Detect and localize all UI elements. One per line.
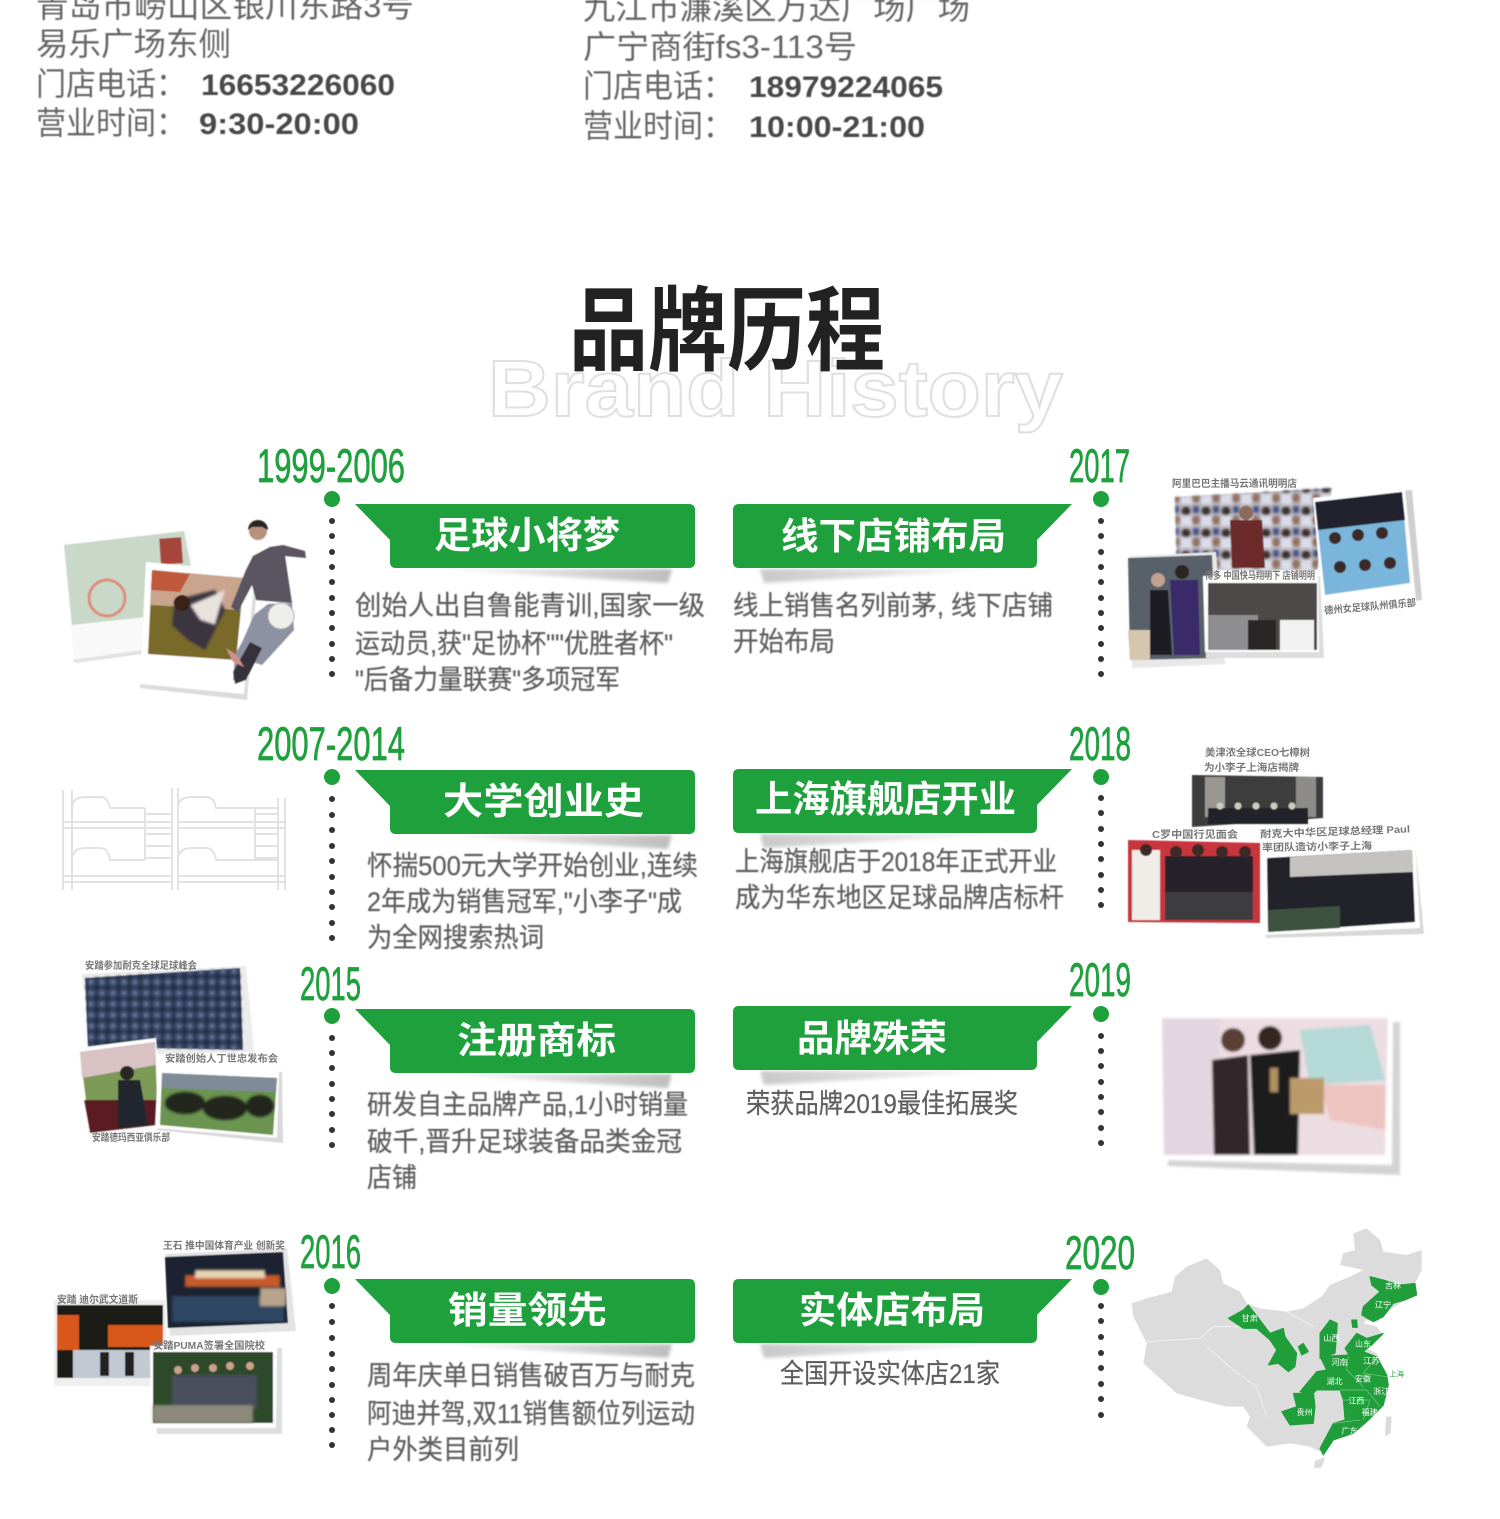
year: 2017 (1069, 439, 1130, 492)
year: 2018 (1069, 717, 1131, 770)
timeline entry: 2016 (54, 1225, 695, 1465)
store address: Qingdao: 16653226060 (201, 69, 395, 102)
province labels: 福建 (1362, 1407, 1378, 1417)
province labels: 吉林 (1385, 1280, 1401, 1290)
banner (733, 769, 1072, 848)
icon: bunk beds line drawing (63, 788, 285, 890)
store address: Jiujiang: 营业时间： (583, 108, 733, 144)
timeline dots (324, 769, 340, 941)
caption: 安踏 迪尔武文道斯 (57, 1293, 138, 1306)
description: 全国开设实体店21家 (780, 1359, 1000, 1389)
timeline dots (1093, 1006, 1109, 1146)
timeline dots (1093, 1279, 1109, 1418)
banner: 线下店铺布局 (781, 516, 1006, 557)
timeline dots (324, 1278, 340, 1448)
banner: 销量领先 (448, 1290, 607, 1331)
banner (733, 1006, 1072, 1085)
province labels: 广东 (1342, 1425, 1358, 1435)
description: 荣获品牌2019最佳拓展奖 (746, 1089, 1018, 1119)
photos: crowd and field (78, 959, 283, 1144)
description: 创始人出自鲁能青训,国家一级 (355, 591, 705, 621)
chinese title: 品牌历程 (569, 281, 885, 383)
province labels: 湖北 (1327, 1377, 1343, 1386)
caption: 安踏创始人丁世忠发布会 (165, 1052, 278, 1065)
banner (733, 1279, 1072, 1358)
caption: 博多 中国快马翔明下 店铺明明 (1205, 569, 1315, 582)
timeline dots (1093, 491, 1109, 677)
description: 运动员,获"足协杯""优胜者杯" (355, 629, 673, 659)
banner (355, 1279, 695, 1358)
province labels: 辽宁 (1375, 1299, 1391, 1309)
caption: 安踏PUMA签署全国院校 (153, 1339, 265, 1352)
timeline entry: 2007-2014 (63, 717, 698, 953)
timeline entry: 1999-2006 (64, 439, 705, 700)
year: 2016 (300, 1225, 361, 1278)
caption: 为小李子上海店揭牌 (1204, 761, 1299, 774)
store address: Qingdao: 营业时间： (36, 105, 186, 141)
store address: Jiujiang: 10:00-21:00 (749, 111, 925, 144)
store address: Jiujiang: 门店电话： (583, 68, 733, 104)
timeline entry: 2019 (733, 953, 1400, 1175)
caption: C罗中国行见面会 (1152, 828, 1238, 841)
description: "后备力量联赛"多项冠军 (355, 665, 620, 695)
description: 店铺 (367, 1163, 417, 1193)
province labels: 江苏 (1363, 1355, 1379, 1365)
player figure (226, 520, 306, 684)
description: 户外类目前列 (367, 1435, 519, 1465)
caption: 耐克大中华区足球总经理 Paul (1260, 822, 1410, 841)
description: 周年庆单日销售破百万与耐克 (367, 1361, 695, 1391)
caption: 王石 推中国体育产业 创新奖 (163, 1239, 285, 1252)
photos: night event and team (54, 1239, 296, 1434)
description: 研发自主品牌产品,1小时销量 (367, 1090, 688, 1120)
section heading (488, 281, 1064, 433)
description: 成为华东地区足球品牌店标杆 (735, 883, 1064, 913)
description: 怀揣500元大学开始创业,连续 (367, 851, 698, 881)
green provinces (1228, 1277, 1417, 1455)
year: 2019 (1069, 953, 1131, 1006)
timeline dots (324, 491, 340, 677)
banner (355, 770, 695, 849)
description (367, 1090, 688, 1193)
store address: Jiujiang: 广宁商街fs3-113号 (583, 29, 857, 65)
photo: award ceremony (1155, 1010, 1400, 1175)
banner: 注册商标 (457, 1020, 616, 1061)
province labels: 河南 (1332, 1357, 1348, 1367)
caption: 阿里巴巴主播马云通讯明明店 (1172, 477, 1297, 490)
year: 2020 (1065, 1226, 1135, 1279)
timeline entry: 2017 (733, 439, 1422, 677)
province labels: 江西 (1348, 1396, 1364, 1405)
banner (355, 504, 695, 583)
description: 线上销售名列前茅, 线下店铺 (733, 591, 1053, 621)
caption: 安踏参加耐克全球足球峰会 (85, 959, 197, 972)
caption: 德州女足球队州俱乐部 (1324, 596, 1416, 617)
year: 2007-2014 (257, 717, 405, 770)
photos: shanghai store events (1128, 746, 1424, 938)
description (367, 1361, 695, 1465)
banner (733, 504, 1072, 583)
caption: 安踏德玛西亚俱乐部 (92, 1131, 170, 1144)
banner: 上海旗舰店开业 (755, 779, 1016, 820)
description: 为全网搜索热词 (367, 923, 544, 953)
province labels: 贵州 (1297, 1407, 1313, 1417)
banner: 大学创业史 (443, 781, 644, 822)
description: 开始布局 (733, 627, 835, 657)
store address: Qingdao: 易乐广场东侧 (36, 26, 231, 62)
caption: 美津浓全球CEO七樟树 (1205, 746, 1310, 759)
timeline dots (324, 1008, 340, 1148)
timeline entry: 2018 (733, 717, 1424, 938)
photos: stores and teams (1128, 477, 1422, 668)
timeline entry: 2015 (78, 957, 695, 1193)
caption: 率团队造访小李子上海 (1262, 839, 1372, 854)
photos: certificate, match and player (64, 520, 306, 700)
description (735, 847, 1064, 913)
province labels: 甘肃 (1242, 1313, 1258, 1323)
timeline entry: 2020 (733, 1226, 1422, 1468)
label: shanghai: 上海 (1389, 1370, 1405, 1379)
timeline dots (1093, 769, 1109, 908)
description (355, 591, 705, 695)
province labels (1242, 1280, 1401, 1435)
store address: Jiujiang: 18979224065 (749, 71, 943, 104)
store address: Qingdao: 9:30-20:00 (199, 108, 359, 141)
province labels: 浙江 (1373, 1386, 1389, 1396)
province labels: 山西 (1323, 1333, 1339, 1343)
banner: 品牌殊荣 (797, 1018, 947, 1059)
description (733, 591, 1053, 657)
english watermark subtitle: Brand History (488, 344, 1064, 433)
banner: 实体店布局 (799, 1290, 985, 1331)
description: 破千,晋升足球装备品类金冠 (367, 1127, 682, 1157)
year: 1999-2006 (257, 439, 405, 492)
province labels: 山东 (1355, 1339, 1371, 1349)
store address: Qingdao: 门店电话： (36, 66, 186, 102)
store address: Jiujiang (583, 0, 970, 144)
province labels: 安徽 (1355, 1374, 1371, 1384)
store addresses (36, 0, 970, 144)
banner (355, 1009, 695, 1088)
description: 上海旗舰店于2018年正式开业 (735, 847, 1057, 877)
map: china store coverage (1132, 1228, 1422, 1468)
year: 2015 (300, 957, 361, 1010)
description: 2年成为销售冠军,"小李子"成 (367, 887, 682, 917)
description (367, 851, 698, 953)
description: 阿迪并驾,双11销售额位列运动 (367, 1399, 695, 1429)
banner: 足球小将梦 (434, 515, 620, 556)
store address: Qingdao (36, 0, 414, 141)
